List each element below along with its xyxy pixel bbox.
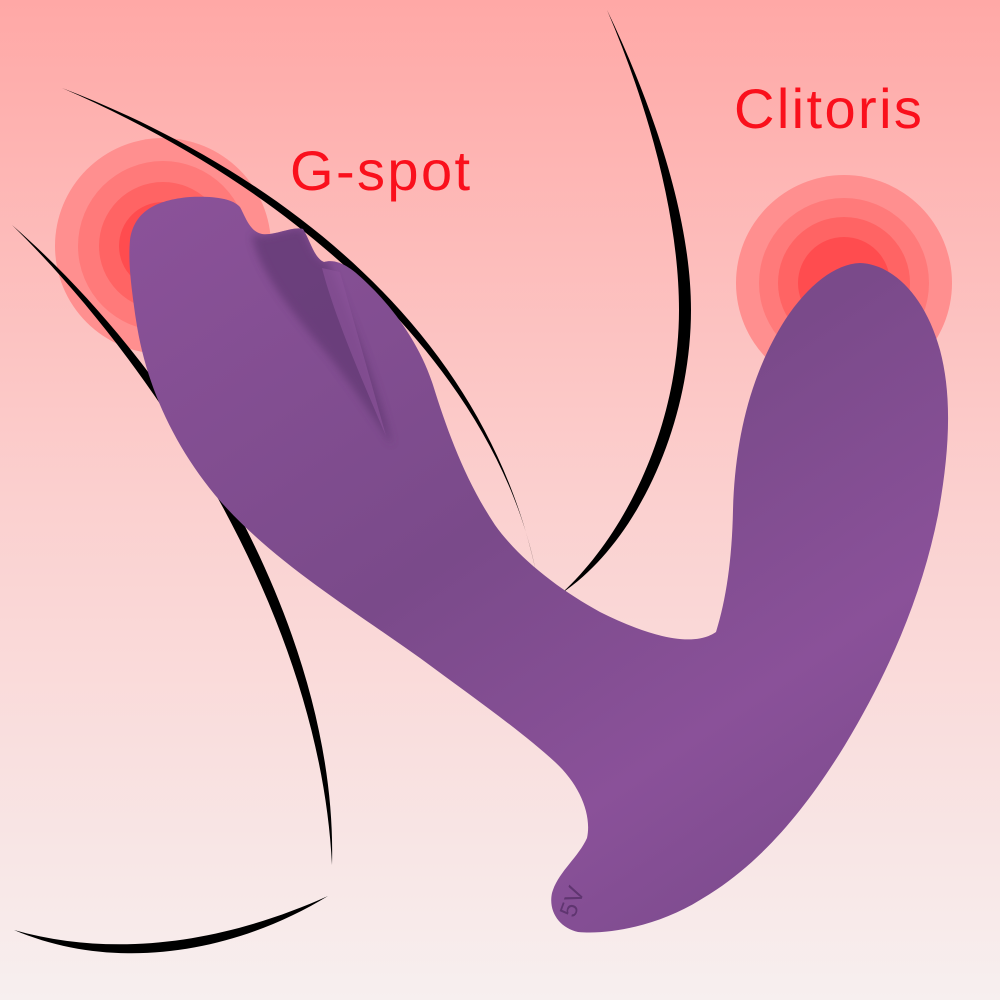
arrow: curved line bottom left — [14, 896, 328, 953]
base embossed mark: 5V — [555, 882, 591, 921]
icon: clitoris target rings — [736, 175, 952, 391]
arrow: curved line left — [12, 225, 332, 865]
ridge highlight — [322, 268, 386, 436]
arrow: curved line upper centre — [562, 10, 691, 593]
heading: G-spot label: G-spot — [290, 139, 472, 202]
arrow: curved line behind G-spot arm — [62, 88, 536, 572]
product silhouette — [129, 197, 948, 933]
G-spot ridge shading — [252, 229, 392, 445]
icon: G-spot target rings — [55, 138, 271, 354]
heading: Clitoris label: Clitoris — [734, 77, 924, 140]
